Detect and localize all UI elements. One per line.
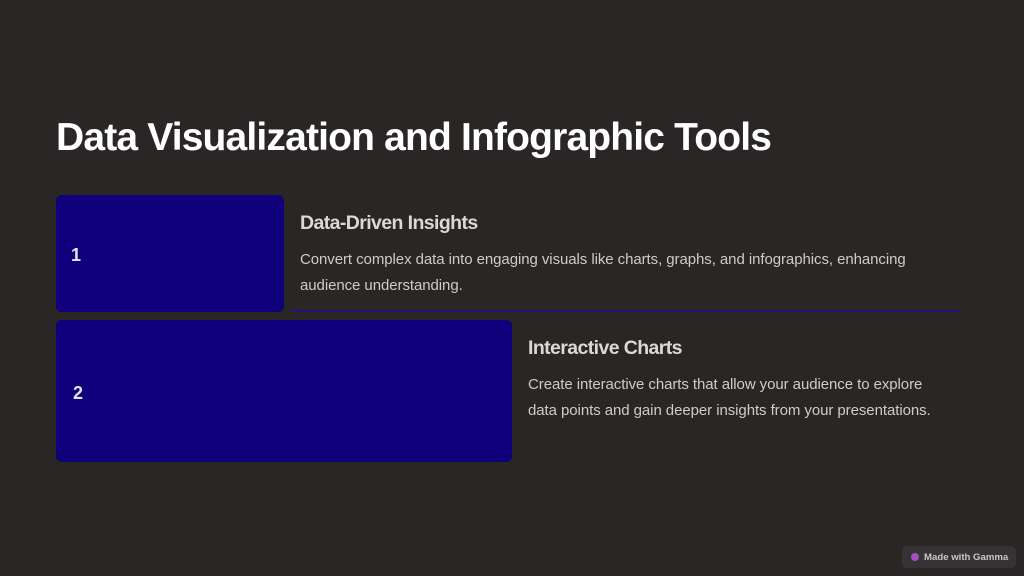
text: step 1 description: audience understanding. bbox=[300, 277, 463, 294]
step 1 number: 1 bbox=[71, 245, 81, 265]
step 2 number: 2 bbox=[73, 383, 83, 403]
badge: Made with Gamma bbox=[902, 546, 1016, 568]
panel: step 1 box bbox=[56, 195, 284, 312]
text: step 2 description bbox=[528, 376, 931, 419]
text: step 1 description bbox=[300, 251, 906, 294]
panel: step 2 box bbox=[56, 320, 512, 462]
text: step 2 description: data points and gain deeper insights from your presentations. bbox=[528, 402, 931, 419]
badge text: Made with Gamma bbox=[924, 552, 1008, 563]
heading: Interactive Charts: Interactive Charts bbox=[528, 337, 682, 359]
text: step 1 description: Convert complex data into engaging visuals like charts, graphs, and infographics, enhancing bbox=[300, 251, 906, 268]
text: step 2 description: Create interactive charts that allow your audience to explore bbox=[528, 376, 922, 393]
title: Data Visualization and Infographic Tools bbox=[56, 116, 771, 159]
heading: Data-Driven Insights: Data-Driven Insights bbox=[300, 212, 478, 234]
icon: Gamma logo bbox=[911, 553, 919, 561]
